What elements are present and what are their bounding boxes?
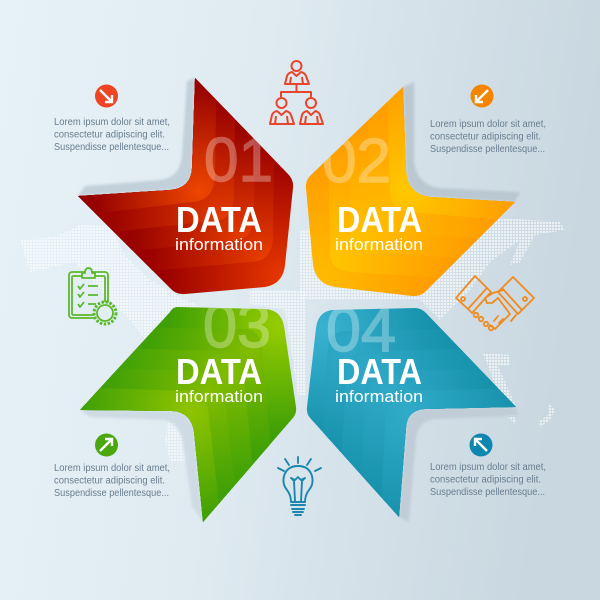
text block top right: consectetur adipiscing elit. xyxy=(430,132,541,142)
icon: light bulb xyxy=(278,457,321,515)
text block top left: Lorem ipsum dolor sit amet, xyxy=(54,117,170,128)
panel: 04 blue arrow xyxy=(306,308,516,517)
text block top left: Suspendisse pellentesque... xyxy=(54,142,169,153)
text block top right: Lorem ipsum dolor sit amet, xyxy=(430,119,546,130)
icon: green arrow badge xyxy=(95,434,118,456)
number 03: 03 xyxy=(203,292,271,361)
icon: organisation chart xyxy=(270,61,323,124)
label 03: DATA xyxy=(176,351,262,392)
text block top right: Suspendisse pellentesque... xyxy=(430,144,545,155)
icon: clipboard with gear xyxy=(69,268,116,324)
label 02: DATA xyxy=(337,199,422,240)
label 01: information xyxy=(175,235,263,254)
text block top left: consectetur adipiscing elit. xyxy=(54,130,165,140)
text block bottom left: consectetur adipiscing elit. xyxy=(54,476,165,486)
label 02: information xyxy=(335,235,423,254)
icon: blue arrow badge xyxy=(470,434,492,456)
text block bottom right: Suspendisse pellentesque... xyxy=(430,487,545,498)
world map dotted xyxy=(20,202,565,462)
label 03 xyxy=(175,351,263,406)
label 01 xyxy=(175,199,263,254)
icon: orange arrow badge xyxy=(470,84,494,108)
text block top right xyxy=(430,119,546,155)
label 03: information xyxy=(175,387,263,406)
number 01: 01 xyxy=(204,126,273,195)
panel: 02 orange arrow xyxy=(306,87,515,296)
label 04: information xyxy=(335,387,423,406)
label 01: DATA xyxy=(176,199,262,240)
icon: red arrow badge xyxy=(95,84,118,108)
number 04: 04 xyxy=(326,296,396,365)
text block top left xyxy=(54,117,170,153)
text block bottom right xyxy=(430,462,546,498)
icon: handshake xyxy=(456,276,534,330)
panel shadows xyxy=(78,78,520,522)
text block bottom right: consectetur adipiscing elit. xyxy=(430,474,541,486)
text block bottom right: Lorem ipsum dolor sit amet, xyxy=(430,462,546,473)
label 04: DATA xyxy=(337,351,422,392)
panel: 01 red arrow xyxy=(78,78,294,294)
label 04 xyxy=(335,351,423,406)
number 02: 02 xyxy=(322,127,391,196)
text block bottom left xyxy=(54,463,170,499)
panel: 03 green arrow xyxy=(80,307,296,522)
text block bottom left: Suspendisse pellentesque... xyxy=(54,488,169,499)
label 02 xyxy=(335,199,423,254)
text block bottom left: Lorem ipsum dolor sit amet, xyxy=(54,463,170,474)
